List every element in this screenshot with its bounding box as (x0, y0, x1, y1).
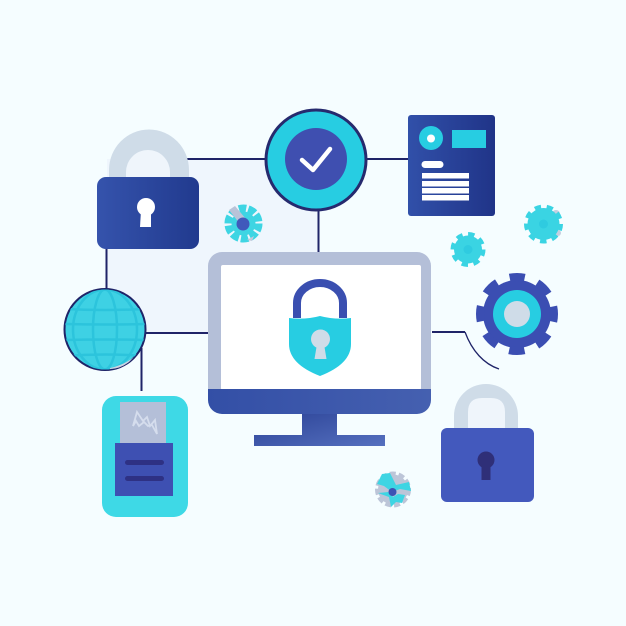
icon: profile document (408, 115, 495, 216)
back panel (107, 159, 318, 333)
icon: large gear (480, 277, 554, 351)
icon: small cyan gear (452, 234, 484, 265)
icon: globe (64, 289, 146, 370)
security infographic illustration (64, 108, 563, 517)
icon: top-left padlock (97, 130, 199, 249)
icon: monitor (208, 252, 431, 446)
icon: bottom-right padlock (441, 384, 534, 502)
icon: flower gear bottom (377, 473, 411, 507)
icon: shield padlock (289, 283, 351, 376)
connector lines (106, 159, 499, 391)
icon: flower gear top (228, 206, 258, 241)
icon: verification badge (266, 110, 366, 210)
icon: cyan gear right (526, 206, 561, 242)
icon: data card (102, 396, 188, 517)
